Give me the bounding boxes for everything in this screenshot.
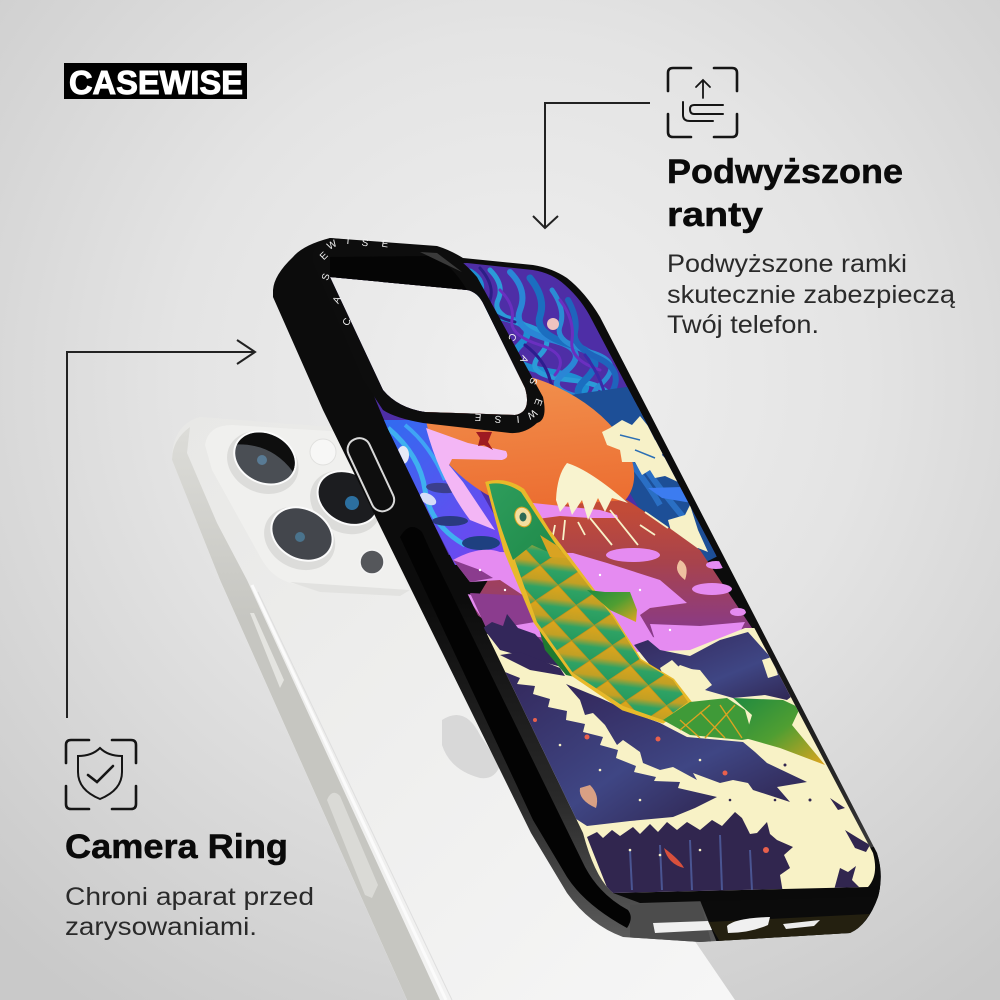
port middle [727,917,770,933]
blue wave area right [572,387,717,562]
wave blob thin [566,684,807,802]
ring label bottom: W [524,406,539,421]
koi fish [487,482,825,765]
ring label bottom: C [505,331,518,342]
text: raised edges description: Twój telefon. [667,311,819,339]
icon: raised edges [668,68,737,137]
camera ring [312,236,545,433]
fish head [489,483,556,560]
text: raised edges description: skutecznie zabezpieczą [667,281,955,309]
corner splashes [830,798,870,890]
text: camera ring description [65,883,314,941]
ring label top: W [325,238,340,253]
heading: raised edges [667,153,903,234]
text: camera ring description: Chroni aparat przed [65,883,314,911]
foam base [486,628,876,893]
ring label bottom: A [517,353,530,364]
case artwork [320,255,900,900]
swirl sky [330,263,716,555]
red tree [476,432,493,450]
top fin [587,590,637,622]
lens lower [264,506,336,570]
case body [260,230,900,950]
petal [677,560,687,580]
pink band across mountain [533,503,618,518]
lens top [227,430,298,494]
mountain peak [556,463,628,520]
ring label bottom: E [474,411,482,422]
phone case [260,230,900,950]
purple cloud bands [453,560,535,630]
foam top right [602,416,678,482]
hollow slot [400,527,631,928]
text: raised edges description [667,250,955,339]
ring label top [318,236,389,328]
ring label bottom [474,331,544,424]
text: camera ring description: zarysowaniami. [65,913,257,941]
gill [540,535,567,558]
wave left of fish [484,614,559,666]
tail base scales [663,698,753,740]
ring label top: I [346,236,350,247]
port right [783,920,820,929]
heading: raised edges: ranty [667,196,763,234]
tail [733,698,825,765]
blue marble left [384,420,504,565]
ring label top: S [320,272,333,282]
camera plateau [205,425,408,590]
ring inner wall [330,256,467,290]
lower fin [537,622,580,678]
ring label top: A [331,295,344,306]
cloud sparkles [479,569,671,631]
arrow: to camera ring [67,340,255,718]
flash [310,439,336,465]
wave blob bottom [587,812,793,895]
spray dots and petals [533,698,769,853]
port left [653,921,712,933]
logo: CASEWISE [69,64,243,101]
ring label top: C [341,317,354,328]
ring label bottom: E [531,397,544,407]
red mountain slope [470,500,800,700]
eye [512,505,534,529]
side button [346,437,396,512]
ring label bottom: S [494,413,502,424]
wave blob large [500,672,717,826]
wave right of fish [634,632,800,700]
ring label top: E [381,239,389,250]
foam lower right [668,505,708,553]
heading: raised edges: Podwyższone [667,153,903,191]
heading: camera ring: Camera Ring [65,828,288,866]
white phone [172,417,735,1000]
text: raised edges description: Podwyższone ramki [667,250,907,278]
arrow: to raised edges [533,103,650,228]
fish outline [487,482,690,722]
sun pink cloud [426,428,507,530]
ring label top: E [318,250,331,263]
sun [426,374,634,506]
volume button [250,613,284,688]
pink clouds [453,550,693,660]
lens right [310,470,378,534]
scaled body [513,530,688,720]
sensor [360,550,384,574]
power button [327,793,378,898]
icon: shield check [66,740,136,809]
apple logo shadow [442,715,500,778]
small pink clouds [606,548,746,616]
foam crest right [660,658,778,690]
ring label top: S [361,238,369,249]
ring label bottom: I [516,413,520,424]
ring label bottom: S [526,376,539,386]
phone side band [172,427,440,1000]
